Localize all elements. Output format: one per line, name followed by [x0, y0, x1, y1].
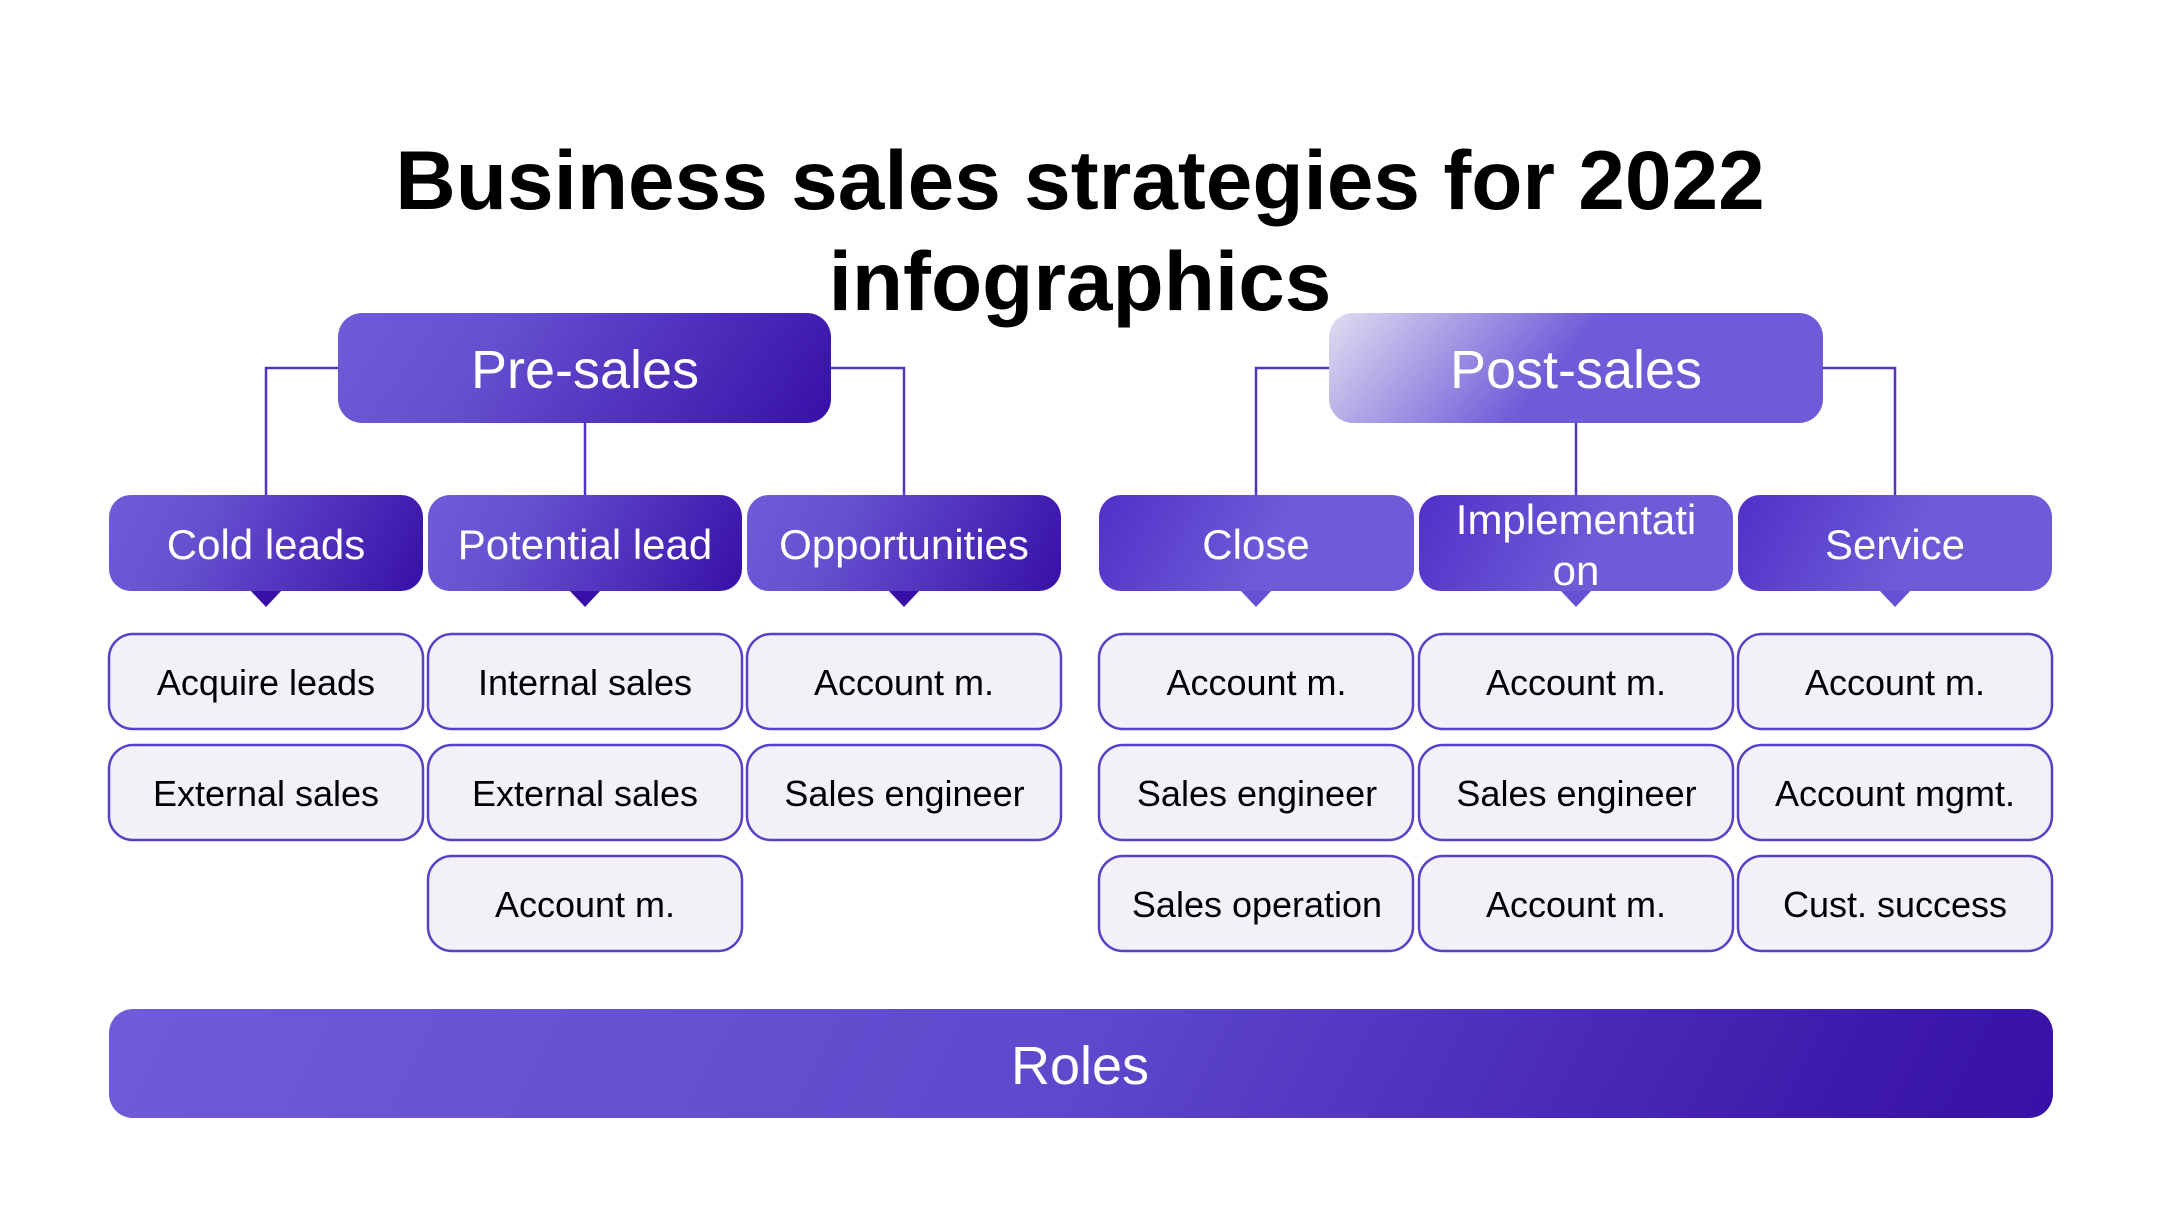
card: sales engineer, opportunities: Sales engineer — [784, 773, 1025, 814]
stage: opportunities: Opportunities — [779, 521, 1029, 568]
card: acquire leads — [109, 634, 423, 729]
card: account m., service: Account m. — [1805, 662, 1985, 703]
card: external sales, potential lead: External sales — [472, 773, 698, 814]
card: sales operation: Sales operation — [1132, 884, 1382, 925]
title: infographics — [829, 234, 1331, 328]
card: cust. success: Cust. success — [1783, 884, 2007, 925]
title: Business sales strategies for 2022 — [395, 133, 1765, 227]
panel: post-sales header — [1329, 313, 1823, 423]
card: account m., implementation row 3 — [1419, 856, 1733, 951]
stage: implementation: Implementati — [1456, 496, 1696, 543]
card: account m., opportunities — [747, 634, 1061, 729]
card: sales engineer, close: Sales engineer — [1137, 773, 1377, 814]
stage: opportunities — [747, 495, 1061, 607]
card: account m., implementation — [1419, 634, 1733, 729]
stage: implementation — [1419, 495, 1733, 607]
card: account m., potential lead: Account m. — [495, 884, 675, 925]
card: account m., implementation: Account m. — [1486, 662, 1666, 703]
card: external sales: External sales — [153, 773, 379, 814]
card: sales engineer, opportunities — [747, 745, 1061, 840]
card: sales operation — [1099, 856, 1413, 951]
stage: cold leads: Cold leads — [167, 521, 365, 568]
card: cust. success — [1738, 856, 2052, 951]
stage: implementation: on — [1553, 547, 1599, 594]
card: sales engineer, close — [1099, 745, 1413, 840]
card: external sales — [109, 745, 423, 840]
roles bar — [109, 1009, 2053, 1118]
panel: post-sales header: Post-sales — [1450, 340, 1702, 400]
card: external sales, potential lead — [428, 745, 742, 840]
card: internal sales — [428, 634, 742, 729]
card: account m., implementation row 3: Account m. — [1486, 884, 1666, 925]
card: account m., service — [1738, 634, 2052, 729]
stage: service — [1738, 495, 2052, 607]
card: internal sales: Internal sales — [478, 662, 692, 703]
stage: service: Service — [1825, 521, 1965, 568]
connectors: pre-sales — [266, 368, 904, 496]
stage: potential lead — [428, 495, 742, 607]
card: account mgmt.: Account mgmt. — [1775, 773, 2015, 814]
panel: pre-sales header — [338, 313, 831, 423]
stage: potential lead: Potential lead — [458, 521, 712, 568]
stage: close: Close — [1202, 521, 1310, 568]
card: account m., close: Account m. — [1166, 662, 1347, 703]
card: account m., potential lead — [428, 856, 742, 951]
card: acquire leads: Acquire leads — [157, 662, 375, 703]
stage: cold leads — [109, 495, 423, 607]
title — [395, 133, 1765, 328]
card: account m., close — [1099, 634, 1413, 729]
stage: close — [1099, 495, 1414, 607]
roles bar: Roles — [1011, 1036, 1149, 1096]
card: account m., opportunities: Account m. — [814, 662, 994, 703]
card: account mgmt. — [1738, 745, 2052, 840]
panel: pre-sales header: Pre-sales — [471, 340, 699, 400]
card: sales engineer, implementation — [1419, 745, 1733, 840]
connectors: post-sales — [1256, 368, 1895, 496]
card: sales engineer, implementation: Sales engineer — [1456, 773, 1697, 814]
